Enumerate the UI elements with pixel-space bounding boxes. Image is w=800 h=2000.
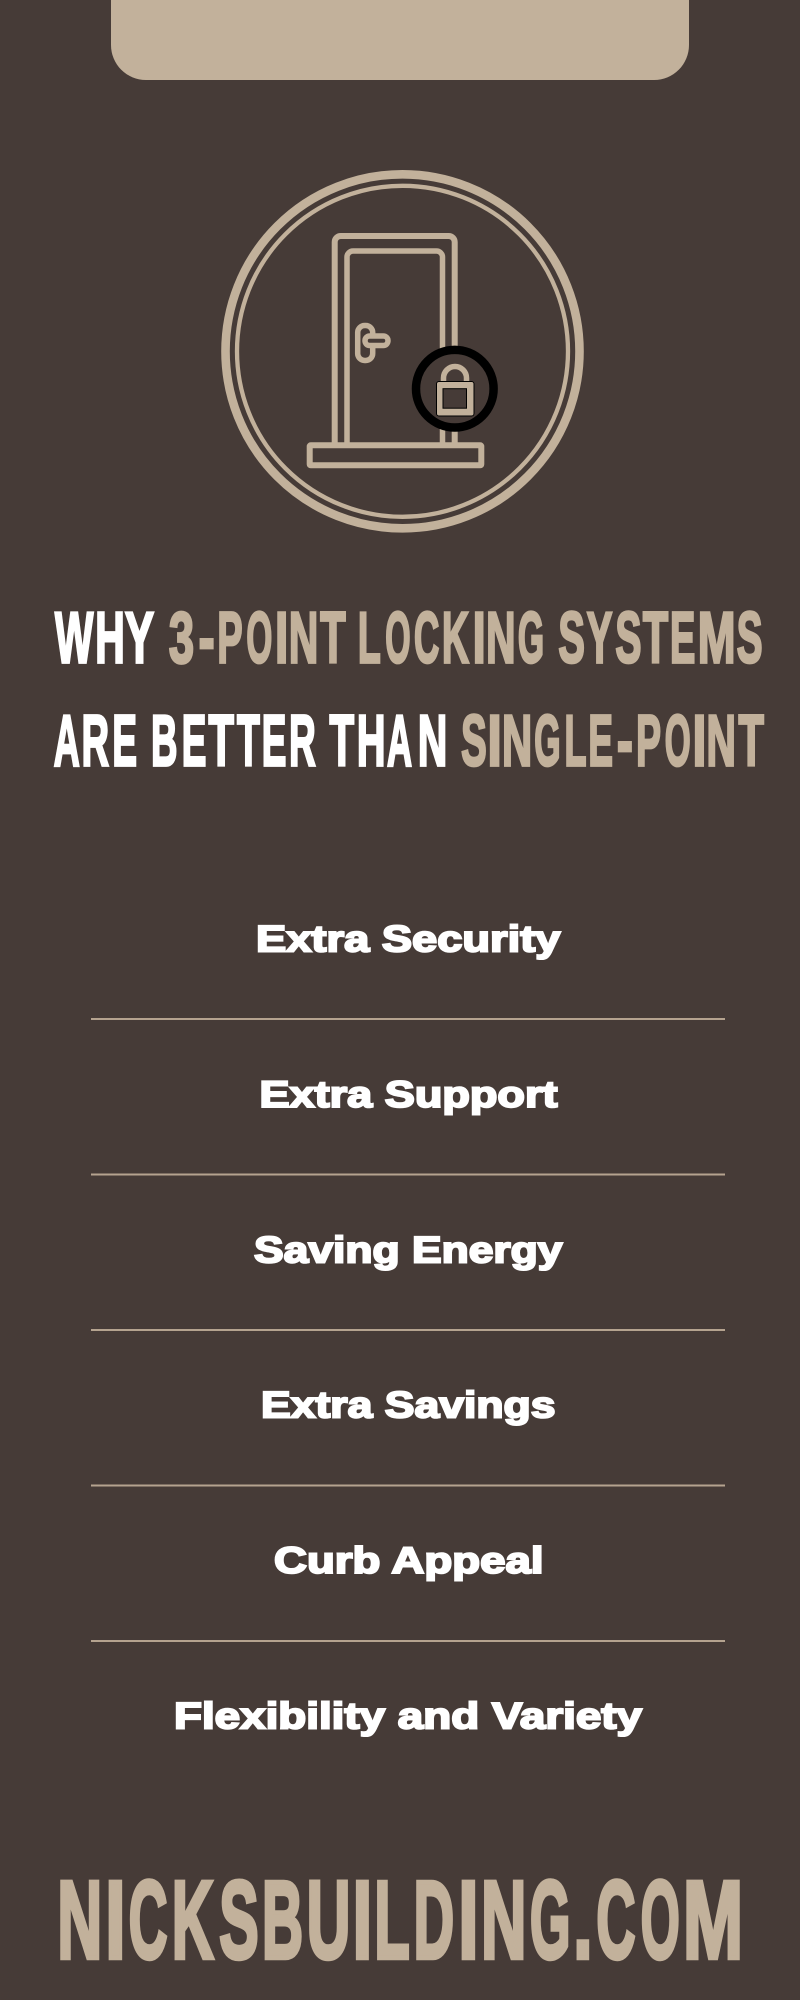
- footer website: I: [353, 1859, 372, 1982]
- title: [54, 599, 764, 782]
- benefits list: [91, 918, 725, 1736]
- item: extra support: Extra Support: [260, 1074, 558, 1115]
- title: T: [643, 599, 668, 679]
- title: L: [564, 702, 586, 782]
- title: H: [357, 702, 386, 782]
- title: C: [414, 599, 439, 679]
- title: K: [442, 599, 469, 679]
- title: I: [473, 599, 486, 679]
- title: E: [670, 599, 695, 679]
- inner ring: [237, 186, 568, 517]
- title: Y: [587, 599, 612, 679]
- title: A: [54, 702, 80, 782]
- title: I: [487, 702, 502, 782]
- title: P: [217, 599, 243, 679]
- item: flexibility and variety: Flexibility and Variety: [174, 1696, 643, 1736]
- title: T: [237, 702, 260, 782]
- door leaf: [347, 251, 442, 445]
- title: S: [461, 702, 487, 782]
- title: N: [418, 702, 447, 782]
- door handle: [358, 326, 388, 360]
- item: curb appeal: Curb Appeal: [274, 1540, 544, 1581]
- title: P: [636, 702, 661, 782]
- door sill: [310, 445, 481, 465]
- title: E: [262, 702, 286, 782]
- title: G: [534, 702, 561, 782]
- footer website: C: [129, 1859, 167, 1982]
- footer website: B: [262, 1859, 303, 1982]
- title: B: [151, 702, 177, 782]
- footer website: U: [307, 1859, 350, 1982]
- title: I: [692, 702, 706, 782]
- footer website: G: [530, 1859, 570, 1982]
- item: extra security: Extra Security: [256, 918, 561, 960]
- title: -: [199, 599, 215, 679]
- door frame: [335, 236, 455, 445]
- title: E: [182, 702, 206, 782]
- footer website: .: [573, 1859, 593, 1982]
- title: H: [95, 599, 125, 679]
- footer website: M: [683, 1859, 743, 1982]
- title: O: [246, 599, 272, 679]
- footer website: I: [105, 1859, 126, 1982]
- title: R: [82, 702, 109, 782]
- title: O: [665, 702, 691, 782]
- title: N: [486, 599, 516, 679]
- footer website: L: [374, 1859, 410, 1982]
- item: saving energy: Saving Energy: [254, 1229, 563, 1270]
- title: N: [289, 599, 318, 679]
- footer website: C: [596, 1859, 636, 1982]
- item: extra savings: Extra Savings: [261, 1385, 556, 1426]
- padlock badge: [416, 350, 494, 428]
- title: T: [738, 702, 764, 782]
- title: T: [320, 599, 346, 679]
- title: I: [275, 599, 288, 679]
- footer website: I: [458, 1859, 478, 1982]
- footer website: O: [641, 1859, 680, 1982]
- footer website: N: [481, 1859, 526, 1982]
- title: T: [208, 702, 234, 782]
- title: S: [737, 599, 763, 679]
- title: T: [330, 702, 354, 782]
- footer website: S: [219, 1859, 259, 1982]
- title: 3: [169, 599, 194, 679]
- title: S: [615, 599, 642, 679]
- outer ring: [226, 174, 580, 528]
- title: O: [385, 599, 411, 679]
- title: -: [617, 702, 633, 782]
- title: S: [558, 599, 585, 679]
- title: W: [55, 599, 93, 679]
- footer website: K: [172, 1859, 214, 1982]
- title: E: [112, 702, 137, 782]
- footer website: D: [414, 1859, 454, 1982]
- title: N: [502, 702, 532, 782]
- footer website: N: [57, 1859, 102, 1982]
- icon: door with padlock in double circle: [226, 174, 580, 528]
- title: G: [518, 599, 544, 679]
- title: L: [358, 599, 381, 679]
- title: E: [588, 702, 613, 782]
- title: M: [698, 599, 736, 679]
- title: Y: [125, 599, 154, 679]
- title: A: [387, 702, 412, 782]
- title: R: [289, 702, 316, 782]
- title: N: [706, 702, 736, 782]
- top tan panel: [111, 0, 689, 80]
